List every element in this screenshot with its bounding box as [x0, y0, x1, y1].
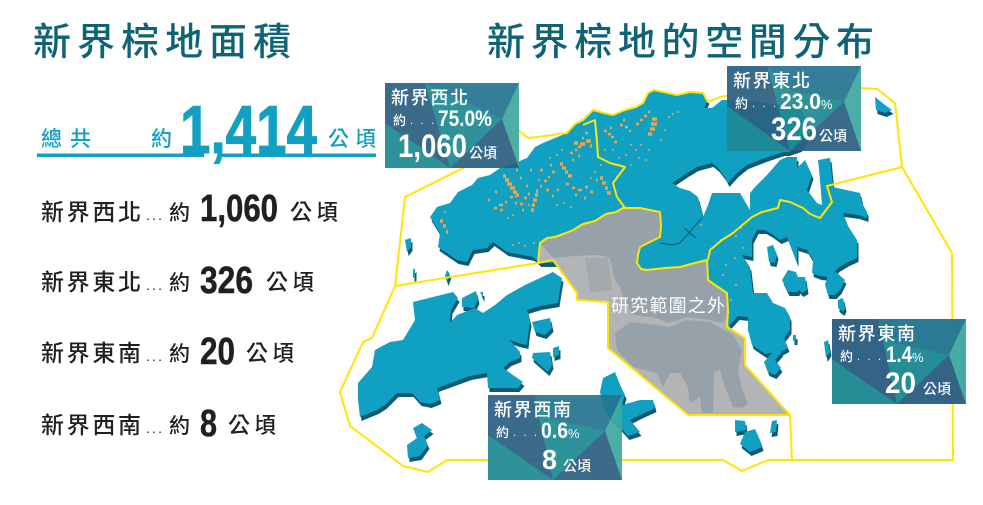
panel: northwest: 75.0%: [438, 106, 492, 131]
panel: southeast: . . .: [857, 351, 881, 363]
row: southwest: 新界西南: [41, 406, 141, 440]
row: northwest: ...: [146, 207, 162, 223]
panel: northeast: . . .: [752, 98, 776, 110]
panel: southeast: 公頃: [923, 379, 951, 399]
map of Hong Kong: [340, 87, 953, 472]
panel: southeast: 約: [840, 346, 853, 365]
land shadow: [360, 94, 894, 462]
row: northeast: 新界東北: [41, 263, 141, 297]
row: northwest: [41, 188, 338, 230]
panel: northeast: 326: [771, 111, 817, 147]
row: northwest: 1,060: [200, 188, 278, 230]
total area: 約: [151, 123, 172, 153]
row: northeast: ...: [146, 277, 162, 293]
panel: northwest: 約: [393, 110, 406, 129]
land: [358, 90, 892, 458]
row: northeast: 公頃: [266, 265, 314, 297]
total area: 總共: [41, 123, 91, 153]
label: outside study area: 研究範圍之外: [611, 292, 725, 318]
row: southwest: 8: [200, 403, 217, 445]
panel: southwest: 8: [542, 444, 557, 475]
row: southeast: 公頃: [246, 336, 294, 368]
panel: northwest: . . .: [410, 115, 434, 127]
district boundaries: [340, 87, 953, 472]
panel: southeast: 1.4: [886, 342, 913, 367]
row: northwest: 新界西北: [41, 193, 141, 227]
row: northwest: 公頃: [290, 195, 338, 227]
panel: northeast: 約: [735, 93, 748, 112]
panel: southwest: 新界西南: [494, 396, 571, 422]
row: southwest: ...: [146, 420, 162, 436]
panel: northwest: [385, 83, 519, 168]
row: southeast: 新界東南: [41, 334, 141, 368]
row: southeast: ...: [146, 348, 162, 364]
total area: 1,414: [180, 92, 317, 168]
panel: southwest: %: [568, 426, 580, 441]
panel: southeast: 新界東南: [838, 320, 915, 346]
MTR tunnel line: [660, 218, 702, 245]
row: southeast: 20: [200, 331, 235, 373]
panel: northeast: 23.0: [780, 89, 821, 114]
panel: southwest: . . .: [513, 427, 537, 439]
out-of-scope grey zone: [538, 208, 790, 415]
row: northeast: 326: [200, 260, 253, 302]
boundary: southwest and south outer: [340, 286, 792, 472]
row: northeast: [41, 260, 314, 302]
row: southeast: 約: [169, 338, 190, 368]
panel: northeast: 新界東北: [733, 67, 810, 93]
boundary: northwest and northeast outer: [395, 87, 953, 460]
row: southwest: 約: [169, 410, 190, 440]
panel: southwest: [488, 395, 622, 480]
panel: southeast: [832, 319, 966, 404]
panel: southeast: 20: [885, 367, 916, 400]
panel: northwest: 新界西北: [391, 84, 468, 110]
title: left heading: 新界棕地面積: [33, 11, 291, 66]
row: northwest: 約: [169, 197, 190, 227]
panel: northeast: [727, 66, 861, 151]
title: right heading: 新界棕地的空間分布: [487, 11, 874, 66]
brownfield speckles: [440, 112, 762, 345]
panel: northeast: %: [821, 97, 833, 112]
panel: southwest: 公頃: [563, 456, 591, 476]
panel: southeast: %: [912, 350, 924, 365]
row: northeast: 約: [169, 267, 190, 297]
row: southeast: [41, 331, 294, 373]
row: southwest: 公頃: [228, 408, 276, 440]
total area: 公頃: [328, 123, 376, 153]
row: southwest: [41, 403, 276, 445]
panel: northwest: 公頃: [469, 143, 497, 163]
panel: southwest: 0.6: [541, 418, 568, 443]
total area: [37, 92, 376, 168]
panel: northwest: 1,060: [398, 128, 467, 164]
panel: northeast: 公頃: [819, 126, 847, 146]
panel: southwest: 約: [496, 422, 509, 441]
